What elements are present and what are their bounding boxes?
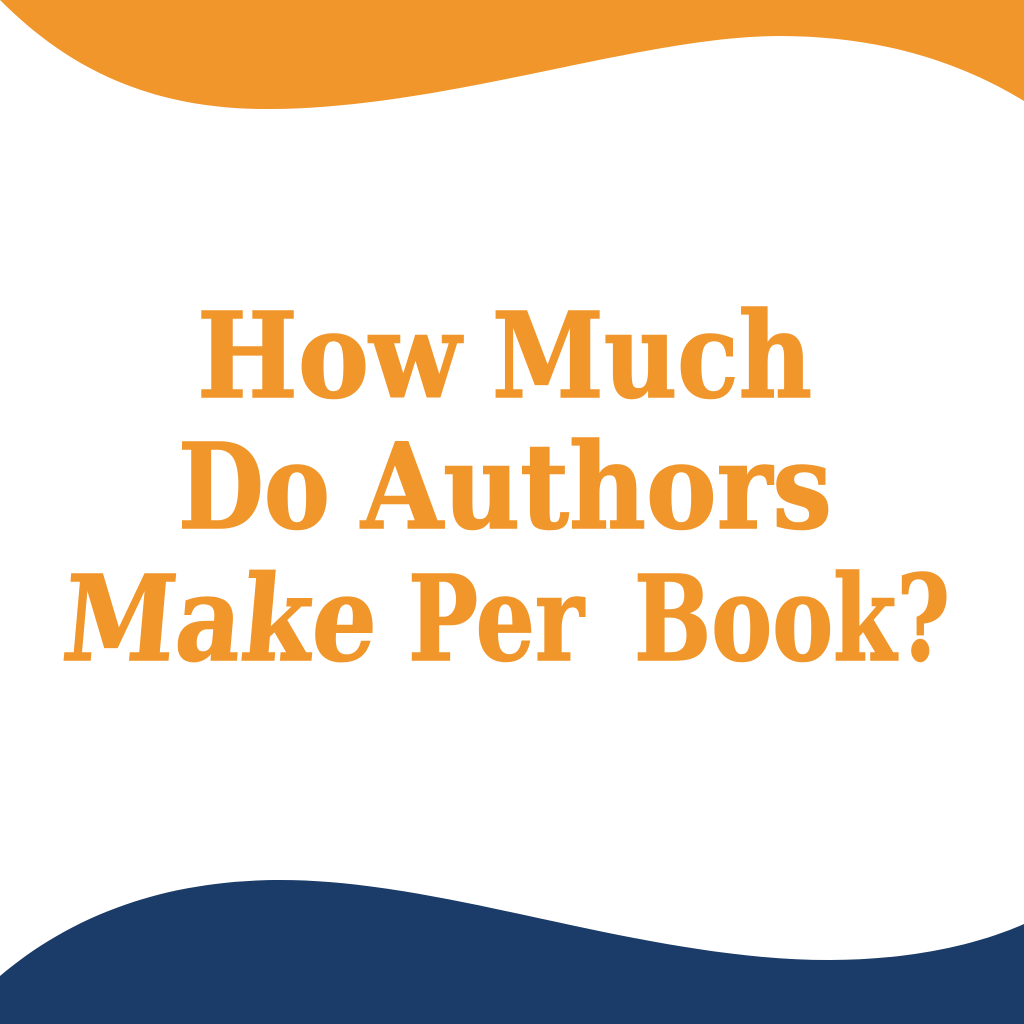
title: Authors xyxy=(360,417,832,556)
title xyxy=(58,286,950,688)
title: Do xyxy=(178,417,330,556)
top orange wave xyxy=(0,0,1024,109)
bottom navy wave xyxy=(0,880,1024,1024)
title: Make xyxy=(58,549,384,688)
title: Per xyxy=(408,549,585,688)
title: Much xyxy=(492,286,812,425)
title: How xyxy=(197,286,463,425)
